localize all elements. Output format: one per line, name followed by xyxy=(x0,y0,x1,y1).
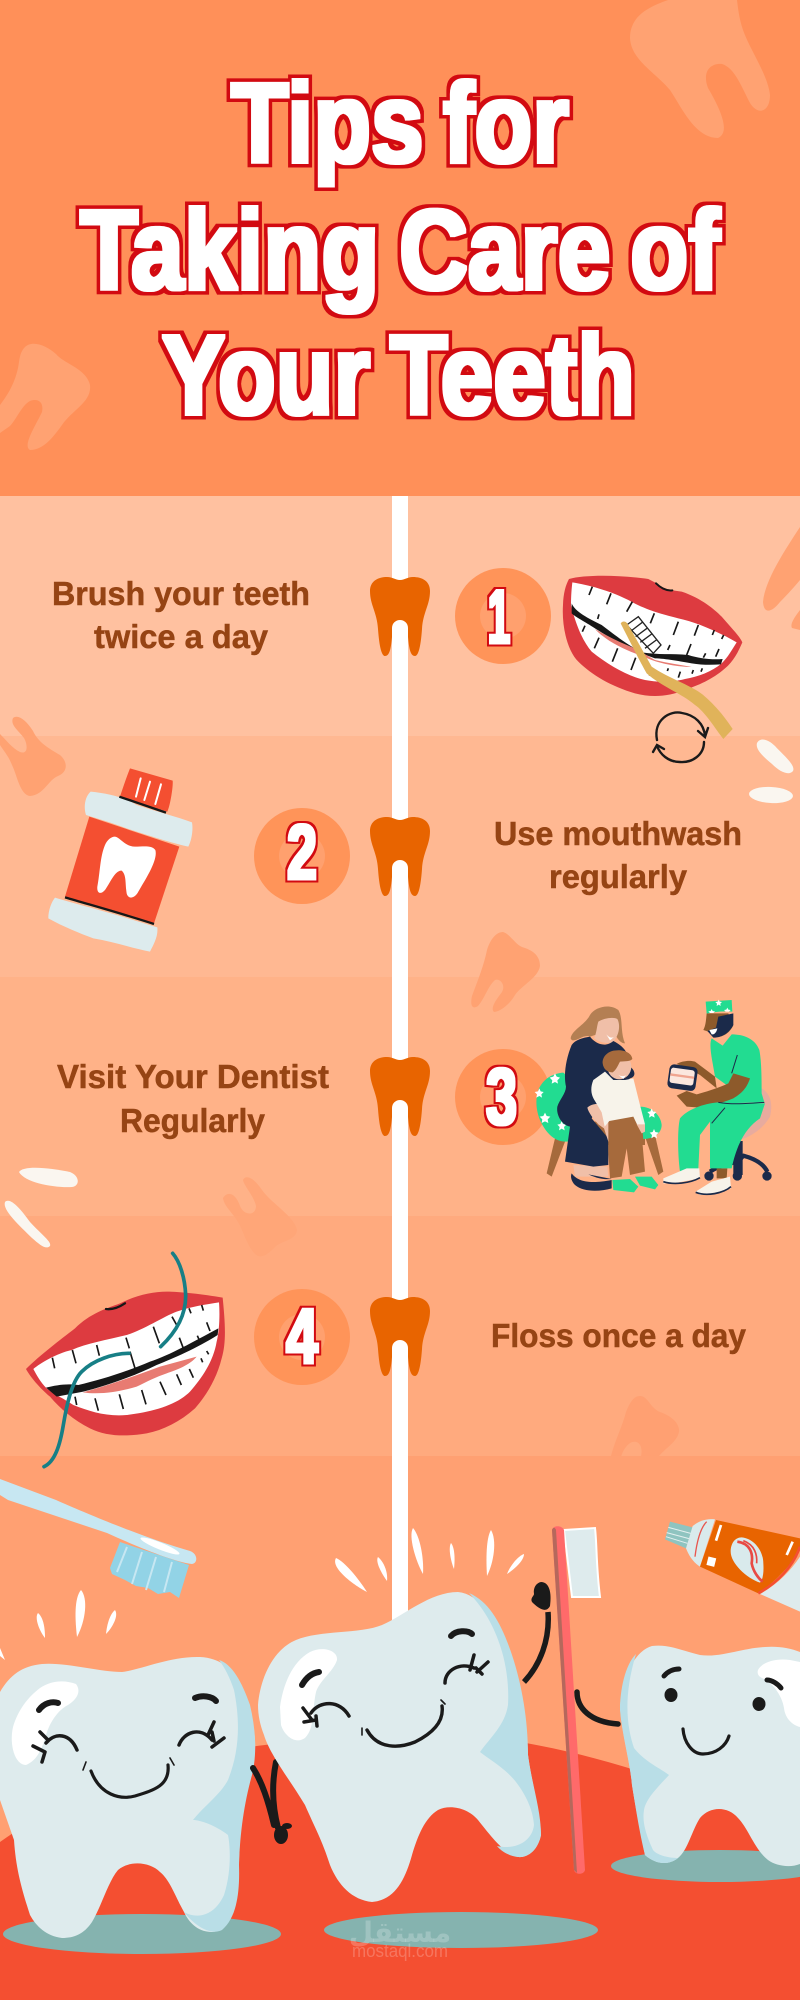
icon: mouth with floss xyxy=(26,1253,225,1467)
title: Tips for xyxy=(231,60,569,186)
decorative tooth: header top right xyxy=(630,0,770,138)
title xyxy=(80,60,720,438)
number badge 4: 4 xyxy=(286,1292,318,1380)
character: left tooth xyxy=(0,1657,255,1938)
text: step 3 xyxy=(57,1058,329,1139)
number badge 1 xyxy=(455,568,551,664)
sparkles xyxy=(0,1528,524,1660)
text: step 2 xyxy=(494,815,742,895)
number badge 2 xyxy=(254,808,350,904)
character: right tooth xyxy=(620,1646,800,1866)
text: step 1: twice a day xyxy=(94,618,269,655)
icon: mouthwash bottle xyxy=(48,768,192,952)
icon: timeline tooth 3 xyxy=(370,1057,430,1136)
watermark: mostaql.com xyxy=(352,1941,448,1961)
decoration: white dashes left xyxy=(5,1168,78,1247)
text: step 2: Use mouthwash xyxy=(494,815,742,852)
icon: timeline tooth 4 xyxy=(370,1297,430,1376)
shadow ellipses xyxy=(3,1850,800,1954)
character: right tooth arm xyxy=(577,1692,618,1724)
text: step 1: Brush your teeth xyxy=(52,575,310,612)
character: right arm raised xyxy=(524,1582,551,1682)
icon: pink toothbrush xyxy=(552,1526,600,1874)
panel: header background xyxy=(0,0,800,496)
woman xyxy=(557,1006,634,1191)
vertical timeline line xyxy=(392,496,408,1626)
decoration: white dashes right xyxy=(749,739,793,804)
text: step 3: Visit Your Dentist xyxy=(57,1058,329,1095)
panel: bottom scene background xyxy=(0,1456,800,2000)
red floor xyxy=(0,1733,800,2000)
panel: step 4 band xyxy=(0,1216,800,1456)
character: left arm link between teeth xyxy=(253,1762,292,1844)
number badge 1: 1 xyxy=(488,575,510,660)
icon: smiling mouth with toothbrush xyxy=(563,576,742,739)
text: step 3: Regularly xyxy=(120,1102,266,1139)
icon: toothpaste tube xyxy=(665,1519,800,1612)
panel: step 3 band xyxy=(0,977,800,1216)
icon: blue toothbrush xyxy=(0,1479,196,1598)
number badge 3: 3 xyxy=(486,1052,517,1141)
text: step 1 xyxy=(52,575,310,655)
decorative tooth: step 1 right xyxy=(763,527,800,630)
chair xyxy=(535,1073,663,1177)
panel: step 1 band xyxy=(0,496,800,736)
icon: timeline tooth 2 xyxy=(370,817,430,896)
dentist xyxy=(663,1000,772,1195)
icon: timeline tooth 1 xyxy=(370,577,430,656)
number badge 3 xyxy=(455,1049,551,1145)
decorative tooth: step 3 bottom xyxy=(223,1177,297,1256)
decorative tooth: step 2 bottom xyxy=(471,932,540,1012)
child xyxy=(591,1050,658,1192)
character: middle tooth xyxy=(258,1592,541,1902)
decorative tooth: step 4 bottom xyxy=(610,1396,679,1460)
number badge 4 xyxy=(254,1289,350,1385)
number badge 2: 2 xyxy=(287,808,317,896)
text: step 4: Floss once a day xyxy=(491,1317,747,1354)
title: Your Teeth xyxy=(162,312,635,438)
watermark: مستقل xyxy=(349,1916,451,1949)
illustration: family at dentist xyxy=(535,1000,772,1195)
icon: rotation arrows xyxy=(653,712,708,762)
panel: step 2 band xyxy=(0,736,800,977)
text: step 2: regularly xyxy=(549,858,688,895)
decorative tooth: step 2 left xyxy=(0,717,66,796)
decorative tooth: header left xyxy=(0,344,90,450)
